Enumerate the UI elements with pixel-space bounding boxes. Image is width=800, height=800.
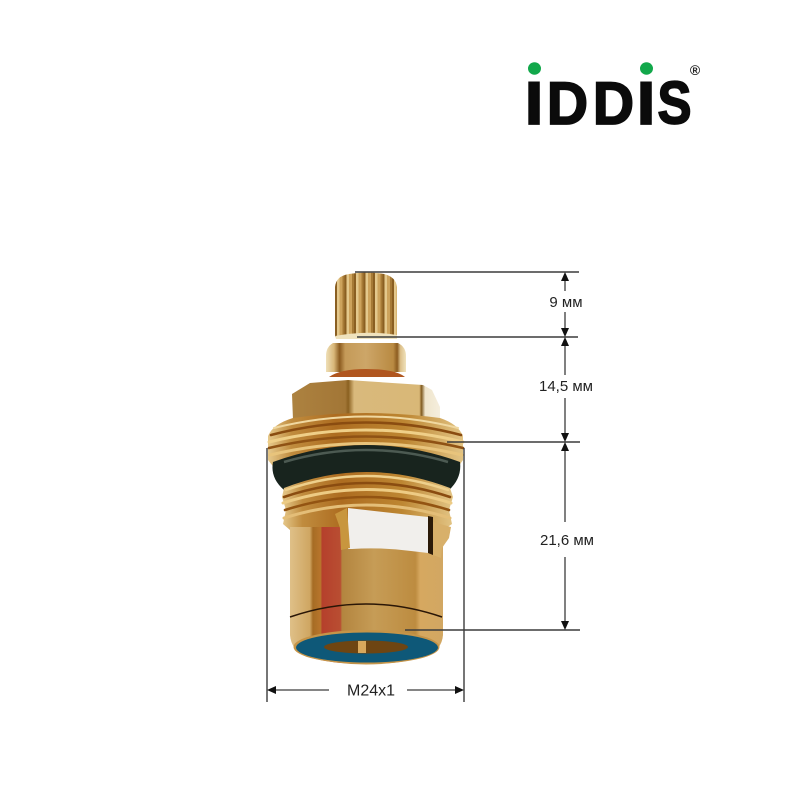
hex nut <box>292 380 440 420</box>
cartridge photo illustration <box>268 272 463 664</box>
logo dots <box>528 62 653 75</box>
logo: IDDIS <box>525 62 701 137</box>
label 9 мм: 9 мм <box>549 294 583 311</box>
inner bore <box>324 640 408 654</box>
dimension lines <box>267 272 580 702</box>
logo lettering: I <box>525 71 543 137</box>
label M24x1: M24x1 <box>347 682 395 700</box>
registered mark: ® <box>690 62 701 78</box>
extension lines <box>267 272 580 702</box>
flange with thread <box>268 413 463 470</box>
dimension M24x1 shaft <box>271 689 460 691</box>
blue seal <box>296 632 438 662</box>
lower thread <box>282 472 453 530</box>
brass tab right <box>433 522 451 558</box>
window slit <box>428 516 433 555</box>
logo lettering <box>525 70 692 137</box>
logo lettering: D <box>593 71 634 137</box>
white ceramic window <box>348 508 428 553</box>
collar <box>326 343 406 377</box>
dimension 21,6 мм shaft <box>564 446 566 626</box>
brass tab left <box>335 508 350 550</box>
label 14,5 мм: 14,5 мм <box>539 378 593 395</box>
dimension 9 мм shaft <box>564 276 566 333</box>
label 21,6 мм: 21,6 мм <box>540 532 594 549</box>
main body <box>290 527 443 664</box>
dimension labels <box>347 294 594 700</box>
logo lettering: I <box>637 71 655 137</box>
dimension 14,5 мм shaft <box>564 341 566 438</box>
stem splines <box>335 272 397 339</box>
body groove <box>290 604 442 617</box>
logo lettering: D <box>547 71 588 137</box>
o-ring seal <box>272 445 460 490</box>
logo lettering: S <box>657 70 692 136</box>
arrowheads <box>267 272 569 694</box>
bottom lip <box>294 630 440 664</box>
